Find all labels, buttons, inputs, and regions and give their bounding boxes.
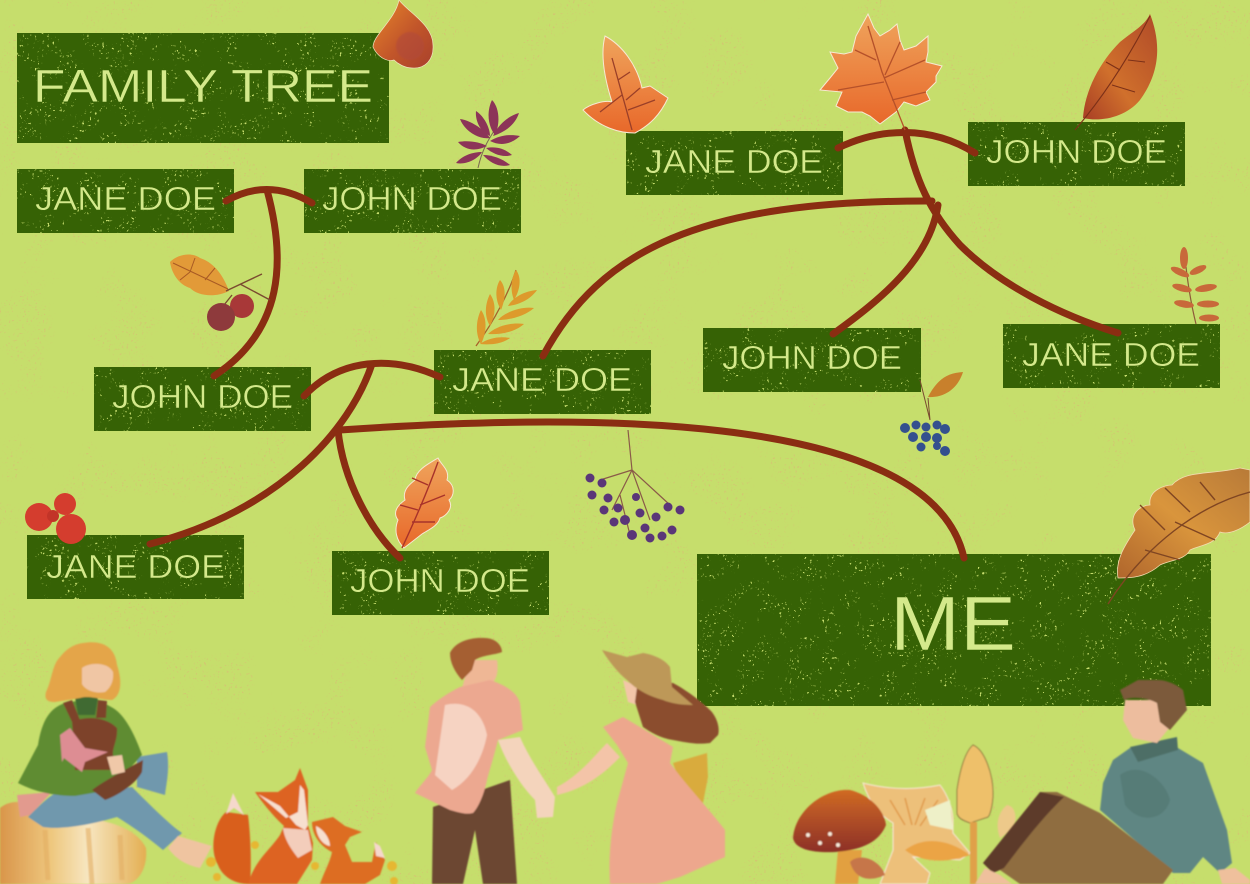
name box: John Doe, father: JOHN DOE [350, 562, 530, 599]
man shirt [415, 680, 523, 814]
bunny [72, 718, 117, 770]
name box: Jane Doe, grandmother [434, 350, 651, 414]
name box: John Doe, grandfather: JOHN DOE [112, 378, 293, 415]
icon: orange fern sprig [1169, 247, 1219, 324]
woman face [623, 680, 645, 705]
woman arm [557, 743, 620, 795]
foot [168, 836, 212, 868]
name box: John Doe, great-uncle [703, 328, 921, 392]
hair [1120, 680, 1187, 730]
man arm [498, 737, 555, 818]
illustration: girl on pumpkin with bunny [0, 642, 212, 884]
name box: Jane Doe, great-grandmother left [17, 169, 234, 233]
raised leg [137, 752, 168, 795]
dress [603, 717, 725, 884]
name box: Jane Doe, mother: JANE DOE [46, 548, 225, 585]
illustration: mushrooms [793, 745, 1015, 884]
illustration: couple holding hands [415, 638, 725, 884]
title text: FAMILY TREE [33, 60, 373, 112]
jeans [28, 787, 182, 850]
illustration: seated boy [975, 680, 1250, 884]
sweater [18, 698, 142, 796]
bunny ears [63, 700, 107, 722]
tree connector lines [150, 130, 1118, 558]
neck collar [75, 697, 98, 715]
illustration: two foxes [206, 768, 398, 884]
feet [975, 868, 1012, 884]
icon: orange oak leaf [396, 458, 453, 548]
oyster mushrooms [863, 783, 970, 884]
small mushroom [998, 805, 1015, 838]
icon: oak leaf with red berries [170, 255, 270, 331]
pumpkin [0, 802, 146, 884]
flowers [206, 841, 398, 884]
name box: Jane Doe, grandmother: JANE DOE [452, 361, 632, 398]
small brown mushroom [850, 858, 885, 879]
name box: John Doe, great-grandfather left: JOHN DOE [322, 180, 502, 217]
bunny leg and hands [92, 760, 143, 800]
sweater [1100, 748, 1232, 873]
straw hat [602, 650, 693, 705]
name box: John Doe, great-grandfather right: JOHN DOE [986, 133, 1167, 170]
icon: red apples [25, 493, 86, 544]
man face [462, 660, 498, 688]
name box: Jane Doe, great-aunt [1003, 324, 1220, 388]
icon: blue berry branch with leaf [900, 372, 963, 456]
name box: Jane Doe, great-grandmother left: JANE DOE [35, 180, 216, 217]
trousers [983, 792, 1173, 884]
woman hair [635, 680, 719, 744]
dark trouser shadow [983, 792, 1064, 873]
man pants [432, 780, 517, 884]
face [82, 664, 113, 693]
face [1123, 700, 1170, 743]
icon: purple sprig [456, 100, 520, 168]
name box: John Doe, great-grandfather right [968, 122, 1185, 186]
name box: John Doe, father [332, 551, 549, 615]
fox tail [213, 812, 251, 884]
name box: John Doe, grandfather [94, 367, 311, 431]
title panel [17, 33, 389, 143]
pink cloth [17, 792, 52, 817]
icon: purple elderberries [586, 430, 684, 542]
name box: John Doe, great-grandfather left [304, 169, 521, 233]
name box: Jane Doe, great-grandmother right [626, 131, 843, 195]
name box: Jane Doe, great-aunt: JANE DOE [1022, 336, 1200, 373]
name box: Me: ME [890, 581, 1016, 667]
icon: red-orange leaf [1075, 14, 1157, 130]
red mushroom stem [835, 850, 862, 884]
name box: Jane Doe, mother [27, 535, 244, 599]
icon: heart-shaped leaf [373, 0, 433, 68]
icon: yellow fern [476, 270, 537, 346]
bag [673, 753, 708, 803]
name box: Jane Doe, great-grandmother right: JANE DOE [645, 143, 823, 180]
name box: John Doe, great-uncle: JOHN DOE [722, 339, 902, 376]
man hair [450, 638, 502, 680]
large fox [248, 768, 313, 884]
pink scarf [60, 728, 108, 772]
icon: large brown leaf [1108, 468, 1250, 604]
hair [45, 642, 120, 702]
collar [1130, 737, 1178, 762]
red mushroom cap [793, 790, 886, 852]
hand [1218, 868, 1250, 884]
small fox [312, 817, 385, 884]
name box: Me [697, 554, 1211, 706]
icon: maple leaf [820, 14, 942, 130]
icon: orange three-lobed leaf [583, 36, 668, 133]
tall mushroom [957, 745, 993, 823]
